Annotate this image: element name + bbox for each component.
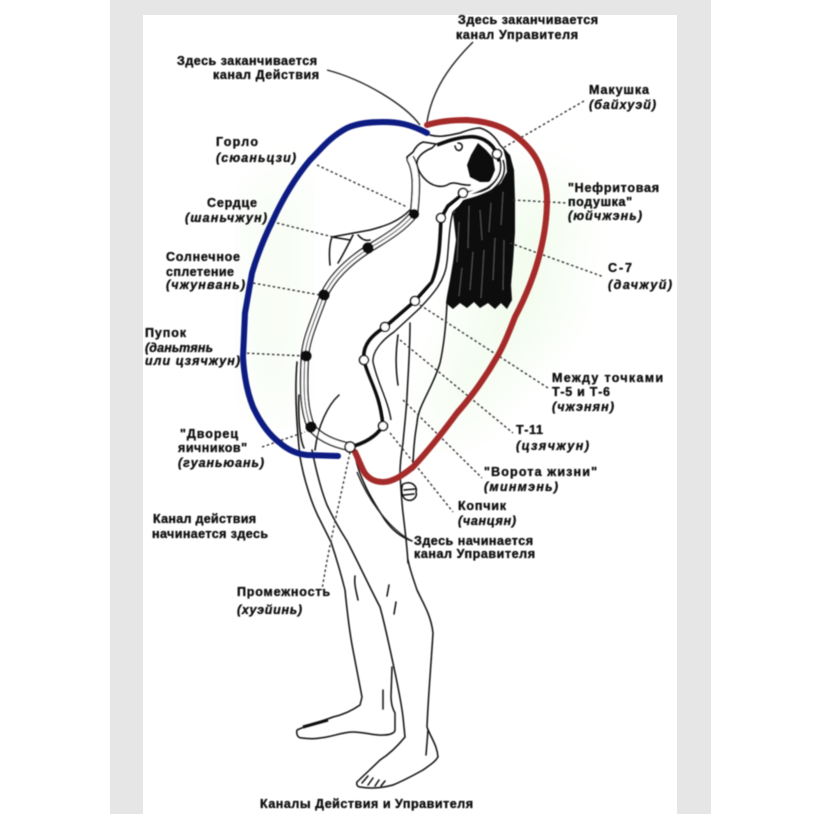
label: C-7: (дачжуй) (608, 278, 672, 292)
label: governor channel begins: канал Управителя (414, 547, 535, 561)
label: governor channel ends: канал Управителя (456, 28, 578, 42)
label: coccyx: Копчик (458, 499, 507, 513)
label: jade pillow: (юйчжэнь) (568, 209, 642, 223)
chest (329, 210, 410, 265)
back and hip lines (315, 303, 447, 563)
rear leg and foot (297, 542, 395, 739)
points on channel of action (300, 209, 419, 432)
label: solar plexus: (чжунвань) (166, 278, 245, 292)
label: solar plexus: Солнечное (166, 250, 240, 264)
label: between T-5 and T-6: Между точками (552, 371, 663, 385)
label: throat: (сюаньцзи) (216, 151, 296, 165)
caption: Каналы Действия и Управителя (260, 797, 473, 811)
label: throat: Горло (216, 135, 258, 149)
leader lines (242, 42, 604, 590)
label: navel: Пупок (145, 326, 187, 340)
label: action channel begins: начинается здесь (152, 527, 268, 541)
label: navel: (даньтянь (145, 341, 213, 355)
channel of action (blue arc) (243, 122, 427, 456)
label: coccyx: (чанцян) (458, 514, 516, 528)
label: gate of life: (минмэнь) (484, 480, 558, 494)
page frame (110, 0, 711, 814)
hair (446, 143, 515, 309)
back channel thick line (350, 137, 500, 447)
front channel triple line (304, 158, 416, 447)
head outline and face (407, 128, 510, 186)
label: navel: или цзячжун) (145, 354, 240, 368)
label: action channel begins: Канал действия (153, 512, 256, 526)
label: action channel ends: канал Действия (213, 68, 319, 82)
label: jade pillow: подушка" (568, 195, 632, 209)
label: T-11: Т-11 (516, 423, 543, 437)
label: palace of ovaries: яичников" (178, 441, 247, 455)
front leg and foot (347, 541, 438, 788)
body figure (296, 128, 515, 788)
label: action channel ends: Здесь заканчивается (177, 54, 317, 68)
label: perineum: Промежность (237, 585, 330, 599)
label: C-7: С-7 (608, 261, 632, 275)
label: gate of life: "Ворота жизни" (484, 465, 597, 479)
label: jade pillow: "Нефритовая (568, 181, 659, 195)
label: solar plexus: сплетение (166, 265, 234, 279)
points on governor channel (345, 150, 502, 452)
label: between T-5 and T-6: Т-5 и Т-6 (552, 385, 610, 399)
label: governor channel ends: Здесь заканчивается (458, 13, 598, 27)
label: governor channel begins: Здесь начинается (414, 534, 533, 548)
label: palace of ovaries: "Дворец (180, 427, 238, 441)
label: heart: (шаньчжун) (185, 211, 267, 225)
label: crown: Макушка (589, 83, 650, 97)
label: perineum: (хуэйинь) (237, 603, 302, 617)
genital detail (402, 483, 416, 500)
label: T-11: (цзячжун) (516, 439, 589, 453)
governor channel (red arc) (355, 120, 547, 482)
label: between T-5 and T-6: (чжэнян) (552, 400, 614, 414)
label: palace of ovaries: (гуаньюань) (178, 456, 264, 470)
thigh lines (296, 362, 412, 542)
label: crown: (байхуэй) (589, 98, 656, 112)
label: heart: Сердце (207, 196, 257, 210)
